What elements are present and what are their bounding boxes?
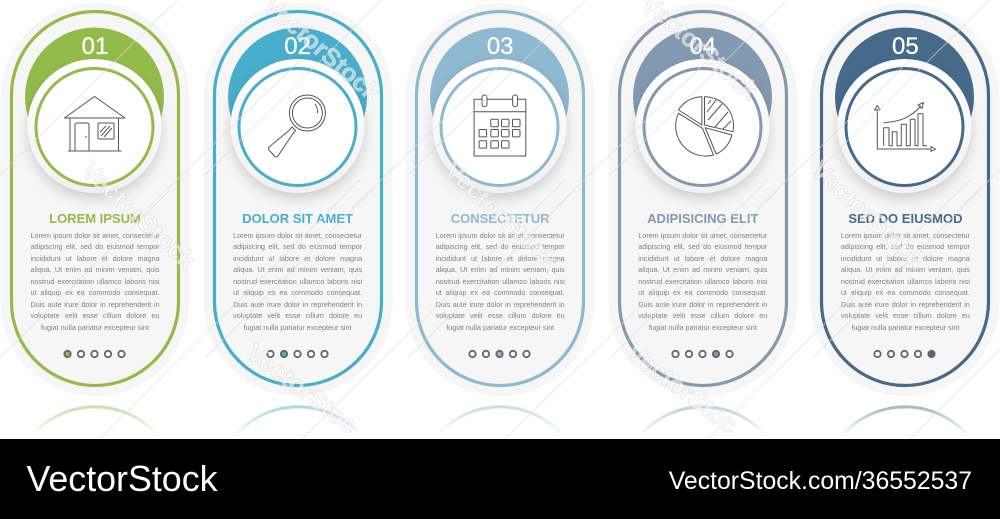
- icon: calendar: [474, 95, 526, 156]
- watermark overlay: VectorStock: [76, 156, 201, 275]
- text block: adipiscing elit, sed do eiusmod tempor: [233, 242, 362, 251]
- text block: Lorem ipsum dolor sit amet, consectetur: [30, 230, 160, 240]
- text block: voluptate velit esse cillum dolore eu: [30, 311, 160, 320]
- text block: aliqua. Ut enim ad minim veniam, quis: [233, 265, 362, 274]
- text block: adipiscing elit, sed do eiusmod tempor: [436, 242, 565, 251]
- text block: voluptate velit esse cillum dolore eu: [638, 311, 767, 320]
- icon: growth chart: [875, 102, 936, 152]
- text block: incididunt ut labore et dolore magna: [638, 254, 767, 263]
- dots: step indicator: [64, 351, 125, 357]
- text block: Lorem ipsum dolor sit amet, consectetur: [233, 230, 362, 240]
- heading: CONSECTETUR: [451, 211, 550, 226]
- heading: ADIPISICING ELIT: [647, 211, 758, 226]
- text block: ut aliquip ex ea commodo consequat.: [233, 288, 362, 297]
- text block: Duis aute irure dolor in reprehenderit in: [841, 300, 970, 309]
- icon: house: [64, 96, 125, 151]
- footer bar: [0, 439, 1000, 519]
- text block: Duis aute irure dolor in reprehenderit in: [233, 300, 362, 309]
- panel: card 04: [608, 3, 798, 432]
- text block: nostrud exercitation ullamco laboris nisi: [30, 277, 160, 286]
- number: 04: [689, 33, 716, 60]
- image url: VectorStock.com/36552537: [669, 468, 972, 494]
- text block: incididunt ut labore et dolore magna: [233, 254, 362, 263]
- text block: voluptate velit esse cillum dolore eu: [841, 311, 970, 320]
- text block: aliqua. Ut enim ad minim veniam, quis: [841, 265, 970, 274]
- heading: LOREM IPSUM: [49, 211, 141, 226]
- icon: magnifier: [268, 95, 325, 157]
- panel: card 03: [406, 3, 594, 432]
- text block: voluptate velit esse cillum dolore eu: [233, 311, 362, 320]
- watermark overlay: VectorStock: [439, 156, 564, 275]
- dots: step indicator: [267, 351, 327, 357]
- number: 03: [487, 33, 514, 60]
- dots: step indicator: [672, 351, 732, 357]
- text block: fugiat nulla pariatur excepteur sint: [41, 323, 149, 332]
- text block: adipiscing elit, sed do eiusmod tempor: [638, 242, 767, 251]
- text block: ut aliquip ex ea commodo consequat.: [436, 288, 565, 297]
- text block: nostrud exercitation ullamco laboris nisi: [841, 277, 970, 286]
- brand name: VectorStock: [26, 458, 218, 498]
- heading: DOLOR SIT AMET: [242, 211, 353, 226]
- text block: fugiat nulla pariatur excepteur sint: [851, 323, 959, 332]
- text block: ut aliquip ex ea commodo consequat.: [841, 288, 970, 297]
- text block: incididunt ut labore et dolore magna: [30, 254, 160, 263]
- number: 01: [82, 33, 108, 60]
- text block: [841, 230, 970, 332]
- icon: pie chart: [675, 97, 733, 156]
- watermark overlay: VectorStock: [806, 156, 931, 275]
- text block: aliqua. Ut enim ad minim veniam, quis: [30, 265, 160, 274]
- number: 05: [892, 33, 919, 60]
- panel: card 02: [204, 3, 392, 433]
- text block: Duis aute irure dolor in reprehenderit in: [436, 300, 565, 309]
- text block: Lorem ipsum dolor sit amet, consectetur: [436, 230, 565, 240]
- text block: Duis aute irure dolor in reprehenderit in: [638, 300, 767, 309]
- text block: ut aliquip ex ea commodo consequat.: [638, 288, 767, 297]
- text block: adipiscing elit, sed do eiusmod tempor: [841, 242, 970, 251]
- dots: step indicator: [469, 351, 530, 357]
- text block: incididunt ut labore et dolore magna: [436, 254, 565, 263]
- heading: SED DO EIUSMOD: [848, 211, 962, 226]
- text block: incididunt ut labore et dolore magna: [841, 254, 970, 263]
- text block: fugiat nulla pariatur excepteur sint: [446, 323, 554, 332]
- text block: nostrud exercitation ullamco laboris nisi: [638, 277, 767, 286]
- text block: [30, 230, 160, 332]
- text block: voluptate velit esse cillum dolore eu: [436, 311, 565, 320]
- text block: fugiat nulla pariatur excepteur sint: [649, 323, 757, 332]
- text block: [233, 230, 362, 332]
- text block: ut aliquip ex ea commodo consequat.: [30, 288, 160, 297]
- watermark overlay: VectorStoc: [621, 338, 743, 439]
- watermark overlay: VectorStoc: [241, 338, 363, 439]
- text block: fugiat nulla pariatur excepteur sint: [244, 323, 352, 332]
- text block: aliqua. Ut enim ad minim veniam, quis: [436, 265, 565, 274]
- panel: card 01: [0, 3, 190, 433]
- panel: card 05: [810, 3, 1000, 433]
- text block: adipiscing elit, sed do eiusmod tempor: [30, 242, 160, 251]
- text block: nostrud exercitation ullamco laboris nisi: [436, 277, 565, 286]
- text block: Lorem ipsum dolor sit amet, consectetur: [841, 230, 970, 240]
- text block: aliqua. Ut enim ad minim veniam, quis: [638, 265, 767, 274]
- dots: step indicator: [875, 351, 935, 357]
- text block: [638, 230, 768, 332]
- text block: Lorem ipsum dolor sit amet, consectetur: [638, 230, 767, 240]
- text block: Duis aute irure dolor in reprehenderit in: [30, 300, 160, 309]
- number: 02: [284, 33, 311, 60]
- text block: nostrud exercitation ullamco laboris nisi: [233, 277, 362, 286]
- text block: [436, 230, 565, 332]
